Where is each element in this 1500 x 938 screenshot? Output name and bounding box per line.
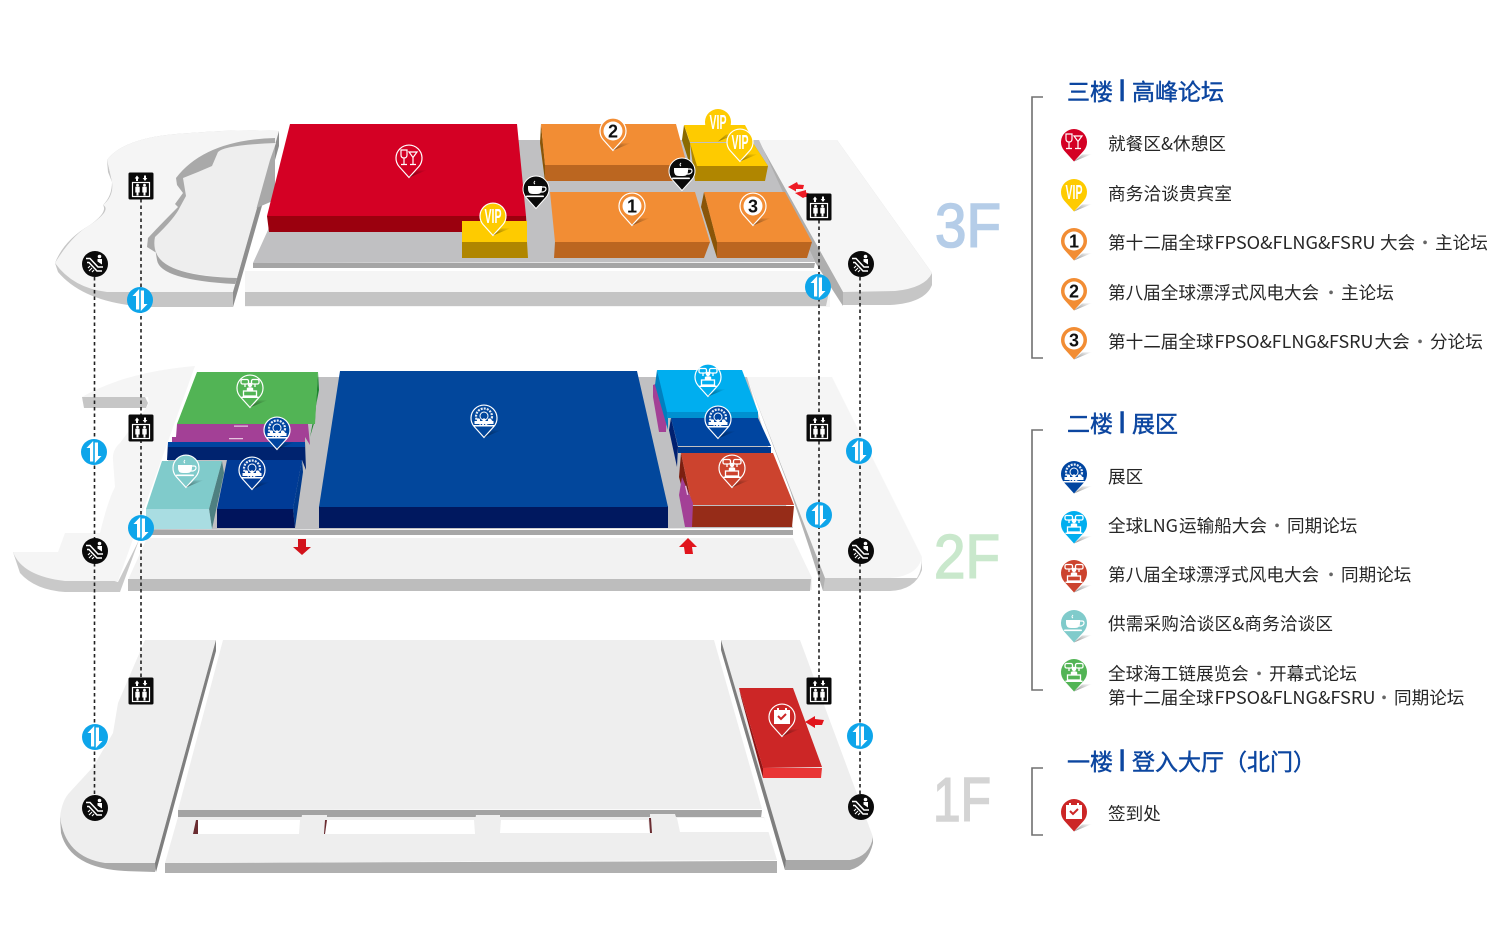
- pin: VIP rear: VIP: [710, 112, 726, 134]
- room: VIP small yellow: [462, 221, 528, 258]
- heading: 高峰论坛: [1132, 73, 1224, 107]
- 1F centre hall: [178, 640, 762, 818]
- legend item: hall 3: [1061, 327, 1483, 360]
- 1F entrance strip: [165, 817, 777, 873]
- dashed vertical connector lines: [94, 186, 860, 808]
- room: cyan forum: [655, 370, 758, 430]
- legend item: hall 2: 2: [1069, 282, 1079, 302]
- room: blue band: [167, 442, 306, 470]
- legend item: hall 2: [1061, 278, 1394, 310]
- legend: second floor: [1032, 405, 1464, 710]
- legend item: marine chain expo: 全球海工链展览会: [1108, 661, 1249, 686]
- room: orange 1: [550, 192, 710, 258]
- room: check-in desk: [739, 688, 822, 778]
- floor label 3F: 3F: [935, 191, 1001, 261]
- heading: 三楼: [1067, 73, 1113, 107]
- 1F entrance connectors: [301, 814, 677, 821]
- purple strip marks: [229, 426, 248, 439]
- icon: escalator 2F left: [82, 538, 108, 564]
- pin: hall 2: 2: [608, 122, 618, 142]
- pin: hall 3: 3: [748, 196, 758, 216]
- icon: stairs 2F outer right: [846, 438, 872, 464]
- icon: stairs 3F right: [805, 274, 831, 300]
- legend item: marine chain expo: 同期论坛: [1394, 685, 1464, 710]
- 3F right wing: [758, 140, 932, 306]
- room: purple strip 1: [176, 424, 310, 445]
- pin: teal lounge: [173, 455, 204, 488]
- legend item: hall 3: FPSO&FLNG&FSRU: [1214, 329, 1374, 354]
- legend item: marine chain expo: [1061, 659, 1464, 710]
- pin: hall 3: [740, 193, 771, 226]
- room: purple side 2: [679, 477, 693, 527]
- legend item: LNG forum: 同期论坛: [1287, 513, 1357, 538]
- pin: VIP small room: VIP: [484, 206, 502, 228]
- pin: coffee black left: [523, 176, 549, 208]
- 2F left wing: [13, 366, 195, 592]
- pin: blue exhibition left: [264, 417, 295, 450]
- icon: escalator 2F right: [848, 538, 874, 564]
- 2F central floor: [128, 377, 812, 591]
- heading: 登入大厅（北门）: [1132, 743, 1316, 777]
- 1F windows: [193, 818, 770, 834]
- bracket: [1032, 430, 1043, 690]
- icon: escalator 3F left: [82, 251, 108, 277]
- room: orange 2: [540, 124, 688, 181]
- pin: check-in: [769, 704, 800, 736]
- pin: VIP small room: [480, 203, 511, 236]
- icon: escalator 1F right: [848, 794, 874, 820]
- 3F central floor: [245, 140, 830, 307]
- legend item: hall 2: ·: [1322, 280, 1340, 305]
- legend item: marine chain expo: 开幕式论坛: [1269, 661, 1357, 686]
- legend item: hall 1: 大会: [1380, 230, 1415, 255]
- icon: stairs 2F outer left: [81, 439, 107, 465]
- room: purple side 1: [653, 383, 667, 432]
- bracket: [1032, 768, 1043, 835]
- legend: first floor: [1032, 743, 1316, 835]
- pin: navy exhibition: [239, 457, 270, 490]
- panel: 2F floor: [13, 366, 922, 592]
- 1F maroon door marks: [193, 818, 652, 834]
- legend item: check-in: 签到处: [1108, 801, 1161, 826]
- legend item: wind forum: 第八届全球漂浮式风电大会: [1108, 562, 1319, 587]
- room: VIP yellow front: [690, 143, 768, 181]
- legend item: procurement: 供需采购洽谈区&商务洽谈区: [1108, 611, 1333, 636]
- icon: elevator 1F right: [806, 678, 832, 704]
- legend item: VIP: VIP: [1066, 182, 1082, 204]
- legend item: VIP: [1061, 179, 1232, 212]
- icon: escalator 3F right: [848, 251, 874, 277]
- icon: stairs 3F left: [127, 287, 153, 313]
- red arrows near elevator: [788, 182, 811, 198]
- legend item: VIP: 商务洽谈贵宾室: [1108, 181, 1232, 206]
- legend item: hall 1: [1061, 228, 1488, 260]
- pin: coffee black right: [669, 158, 695, 190]
- arrow: entrance: [805, 716, 824, 728]
- icon: elevator 3F left: [128, 172, 154, 200]
- 3F markers: [82, 109, 874, 313]
- bracket: [1032, 97, 1043, 358]
- pin: blue exhibition right: [705, 406, 736, 438]
- heading: |: [1119, 76, 1125, 101]
- legend item: wind forum: [1061, 560, 1411, 592]
- legend item: hall 1: ·: [1416, 230, 1434, 255]
- pin: hall 1: 1: [627, 196, 637, 216]
- 2F right wing: [747, 377, 922, 591]
- room: red forum: [679, 453, 794, 527]
- 1F right wing: [721, 640, 873, 870]
- arrow: up: [679, 538, 697, 554]
- panel: 3F floor: [55, 124, 932, 307]
- room: VIP yellow rear: [682, 125, 754, 165]
- legend item: dining: 就餐区&休憩区: [1108, 131, 1226, 156]
- heading: 展区: [1132, 405, 1178, 439]
- icon: stairs 1F right: [847, 723, 873, 749]
- pin: VIP rear: [705, 109, 736, 142]
- icon: elevator 2F right: [806, 414, 832, 442]
- room: teal lounge: [146, 461, 224, 529]
- arrow: down: [293, 539, 311, 555]
- pin: VIP front: VIP: [732, 132, 748, 154]
- legend item: check-in: [1061, 799, 1161, 832]
- pin: VIP front: [727, 129, 758, 162]
- 1F left wing: [60, 640, 216, 872]
- floor label 2F: 2F: [934, 522, 1000, 592]
- legend item: exhibition: 展区: [1108, 464, 1143, 489]
- legend item: hall 3: 分论坛: [1430, 329, 1483, 354]
- room: main exhibition hall: [319, 371, 668, 528]
- 1F markers: [82, 678, 874, 821]
- room: navy exhibition: [217, 460, 303, 528]
- room: orange 3: [701, 192, 812, 258]
- icon: escalator 1F left: [82, 795, 108, 821]
- legend item: dining: [1061, 129, 1226, 162]
- icon: elevator 1F left: [128, 678, 154, 704]
- legend item: hall 1: FPSO&FLNG&FSRU: [1214, 230, 1376, 255]
- heading: 一楼: [1067, 743, 1113, 777]
- legend item: hall 2: 主论坛: [1341, 280, 1394, 305]
- heading: 二楼: [1067, 405, 1113, 439]
- pin: dining: [396, 145, 427, 178]
- room: dining red: [267, 124, 527, 232]
- pin: cyan forum: [695, 364, 726, 396]
- legend item: hall 1: 1: [1069, 232, 1079, 252]
- legend item: wind forum: ·: [1322, 562, 1340, 587]
- room: green forum: [177, 372, 319, 437]
- legend item: marine chain expo: ·: [1250, 661, 1268, 686]
- icon: stairs 2F inner right: [806, 502, 832, 528]
- icon: stairs 2F inner left: [128, 515, 154, 541]
- legend item: marine chain expo: FPSO&FLNG&FSRU: [1214, 685, 1376, 710]
- pin: red forum: [719, 455, 750, 488]
- legend item: hall 3: ·: [1411, 329, 1429, 354]
- heading: |: [1119, 746, 1125, 771]
- icon: elevator 3F right: [806, 194, 832, 220]
- legend item: marine chain expo: ·: [1375, 685, 1393, 710]
- legend item: procurement: [1061, 610, 1333, 642]
- 2F markers: [81, 364, 874, 564]
- legend item: LNG forum: ·: [1268, 513, 1286, 538]
- pin: green forum: [237, 375, 268, 408]
- pin: main exhibition: [471, 405, 502, 438]
- floor label 1F: 1F: [933, 765, 991, 835]
- room: blue exhibition: [669, 418, 771, 467]
- room: purple strip 2: [172, 437, 305, 446]
- legend item: LNG forum: LNG: [1143, 513, 1178, 538]
- pin: hall 2: [600, 118, 631, 150]
- legend item: marine chain expo: 第十二届全球: [1108, 685, 1214, 710]
- panel: 1F floor: [60, 640, 873, 873]
- legend item: hall 1: 主论坛: [1435, 230, 1488, 255]
- legend item: exhibition: [1061, 461, 1143, 494]
- legend item: hall 3: 3: [1069, 330, 1079, 350]
- legend item: hall 3: 大会: [1374, 329, 1410, 354]
- legend item: hall 2: 第八届全球漂浮式风电大会: [1108, 280, 1319, 305]
- pin: hall 1: [619, 193, 650, 226]
- heading: |: [1119, 408, 1125, 433]
- icon: stairs 1F left: [82, 724, 108, 750]
- legend item: LNG forum: 运输船大会: [1179, 513, 1267, 538]
- legend item: LNG forum: 全球: [1108, 513, 1143, 538]
- legend item: hall 3: 第十二届全球: [1108, 329, 1214, 354]
- legend item: hall 1: 第十二届全球: [1108, 230, 1214, 255]
- legend: third floor: [1032, 73, 1488, 360]
- legend item: LNG forum: [1061, 511, 1357, 544]
- 3F left wing: [55, 130, 279, 307]
- icon: elevator 2F left: [128, 414, 154, 442]
- legend item: wind forum: 同期论坛: [1341, 562, 1411, 587]
